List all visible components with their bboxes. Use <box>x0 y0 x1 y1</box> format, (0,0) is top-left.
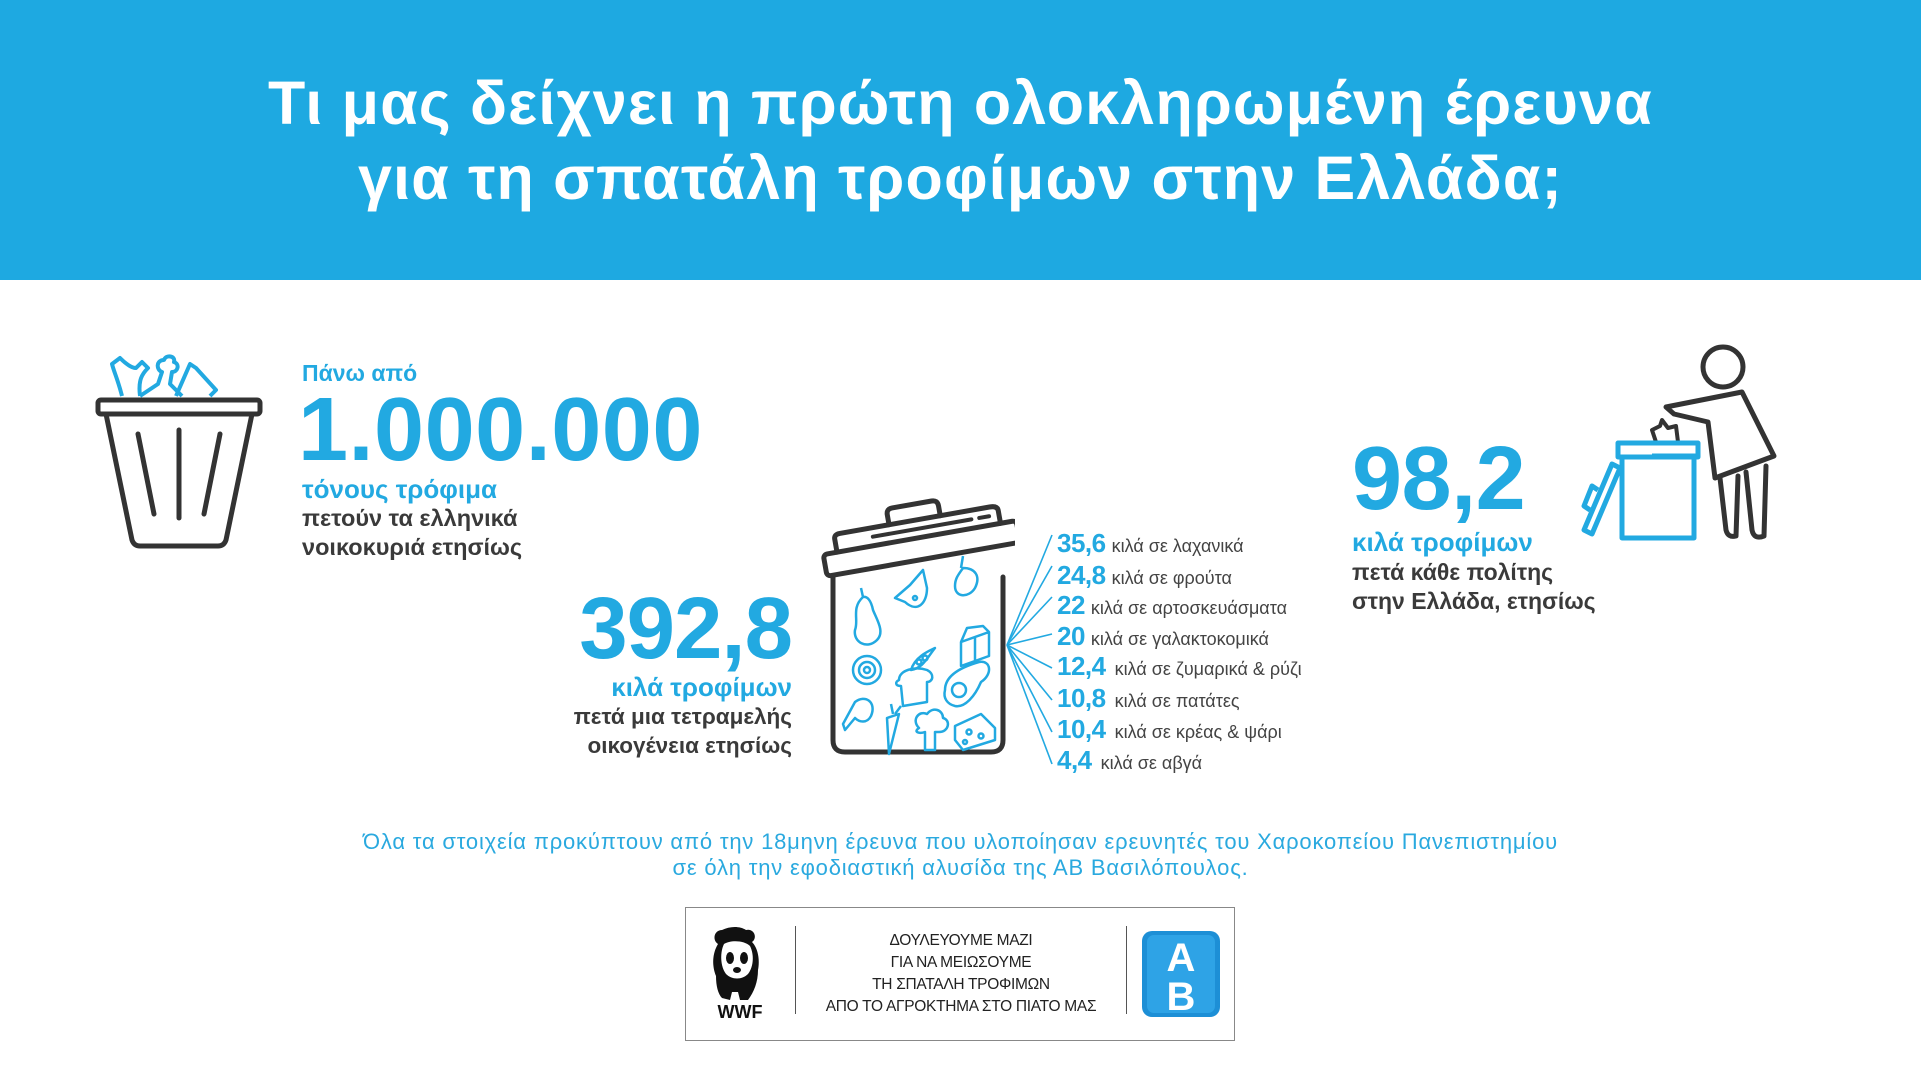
stat: 1.000.000 tonnes: τόνους τρόφιμα <box>302 474 497 504</box>
list: breakdown by food category: 12,4 κιλά σε ζυμαρικά & ρύζι <box>1057 651 1302 681</box>
list: breakdown by food category: 10,4 κιλά σε κρέας & ψάρι <box>1057 714 1282 744</box>
stat: 1.000.000 tonnes <box>298 360 703 560</box>
icon: AB logo: B <box>1167 975 1195 1018</box>
partner logo box <box>685 907 1235 1041</box>
icon: AB logo: A <box>1167 936 1195 980</box>
partnership text: ΔΟΥΛΕΥΟΥΜΕ ΜΑΖΙ <box>890 932 1032 949</box>
partnership text: ΤΗ ΣΠΑΤΑΛΗ ΤΡΟΦΙΜΩΝ <box>872 976 1050 993</box>
title: για τη σπατάλη τροφίμων στην Ελλάδα; <box>358 144 1563 212</box>
stat: 392,8 kg per family <box>574 580 792 758</box>
footnote text <box>362 829 1558 880</box>
icon: WWF panda logo <box>713 927 762 1022</box>
list: breakdown by food category: 24,8 κιλά σε φρούτα <box>1057 560 1232 590</box>
title: Τι μας δείχνει η πρώτη ολοκληρωμένη έρευνα <box>268 69 1653 137</box>
partnership text: ΓΙΑ ΝΑ ΜΕΙΩΣΟΥΜΕ <box>891 954 1031 971</box>
partnership text: ΑΠΟ ΤΟ ΑΓΡΟΚΤΗΜΑ ΣΤΟ ΠΙΑΤΟ ΜΑΣ <box>826 998 1096 1015</box>
stat: 1.000.000 tonnes: πετούν τα ελληνικά <box>302 505 517 531</box>
footnote text: σε όλη την εφοδιαστική αλυσίδα της ΑΒ Βασιλόπουλος. <box>672 855 1249 880</box>
stat: 1.000.000 tonnes: Πάνω από <box>302 360 417 386</box>
title <box>268 69 1653 212</box>
stat: 392,8 kg per family: κιλά τροφίμων <box>611 672 792 702</box>
icon: bin with food items <box>821 498 1015 756</box>
list: breakdown by food category: 10,8 κιλά σε πατάτες <box>1057 683 1240 713</box>
list: breakdown by food category: 22 κιλά σε αρτοσκευάσματα <box>1057 590 1287 620</box>
stat: 98,2 kg per citizen: κιλά τροφίμων <box>1352 527 1533 557</box>
icon: person throwing in bin <box>1581 344 1776 540</box>
list: breakdown by food category: 35,6 κιλά σε λαχανικά <box>1057 528 1244 558</box>
stat: 98,2 kg per citizen <box>1352 429 1596 614</box>
stat: 98,2 kg per citizen: 98,2 <box>1352 429 1525 529</box>
stat: 1.000.000 tonnes: νοικοκυριά ετησίως <box>302 534 522 560</box>
stat: 392,8 kg per family: πετά μια τετραμελής <box>574 704 792 729</box>
list: breakdown by food category: 20 κιλά σε γαλακτοκομικά <box>1057 621 1269 651</box>
list: breakdown by food category <box>1057 528 1302 775</box>
icon: trash can with food <box>96 354 262 548</box>
footnote text: Όλα τα στοιχεία προκύπτουν από την 18μηνη έρευνα που υλοποίησαν ερευνητές του Χαροκοπείου Πανεπιστημίου <box>363 829 1558 854</box>
fan lines from bin to list <box>1006 534 1053 764</box>
stat: 1.000.000 tonnes: 1.000.000 <box>298 380 703 480</box>
icon: AB logo <box>1142 931 1220 1018</box>
stat: 98,2 kg per citizen: πετά κάθε πολίτης <box>1352 559 1553 585</box>
list: breakdown by food category: 4,4 κιλά σε αβγά <box>1057 745 1202 775</box>
partnership text <box>826 932 1096 1015</box>
stat: 392,8 kg per family: 392,8 <box>579 580 792 677</box>
stat: 98,2 kg per citizen: στην Ελλάδα, ετησίως <box>1352 588 1596 614</box>
header banner <box>0 0 1921 280</box>
icon: WWF panda logo: WWF <box>718 1002 762 1022</box>
stat: 392,8 kg per family: οικογένεια ετησίως <box>587 733 792 758</box>
